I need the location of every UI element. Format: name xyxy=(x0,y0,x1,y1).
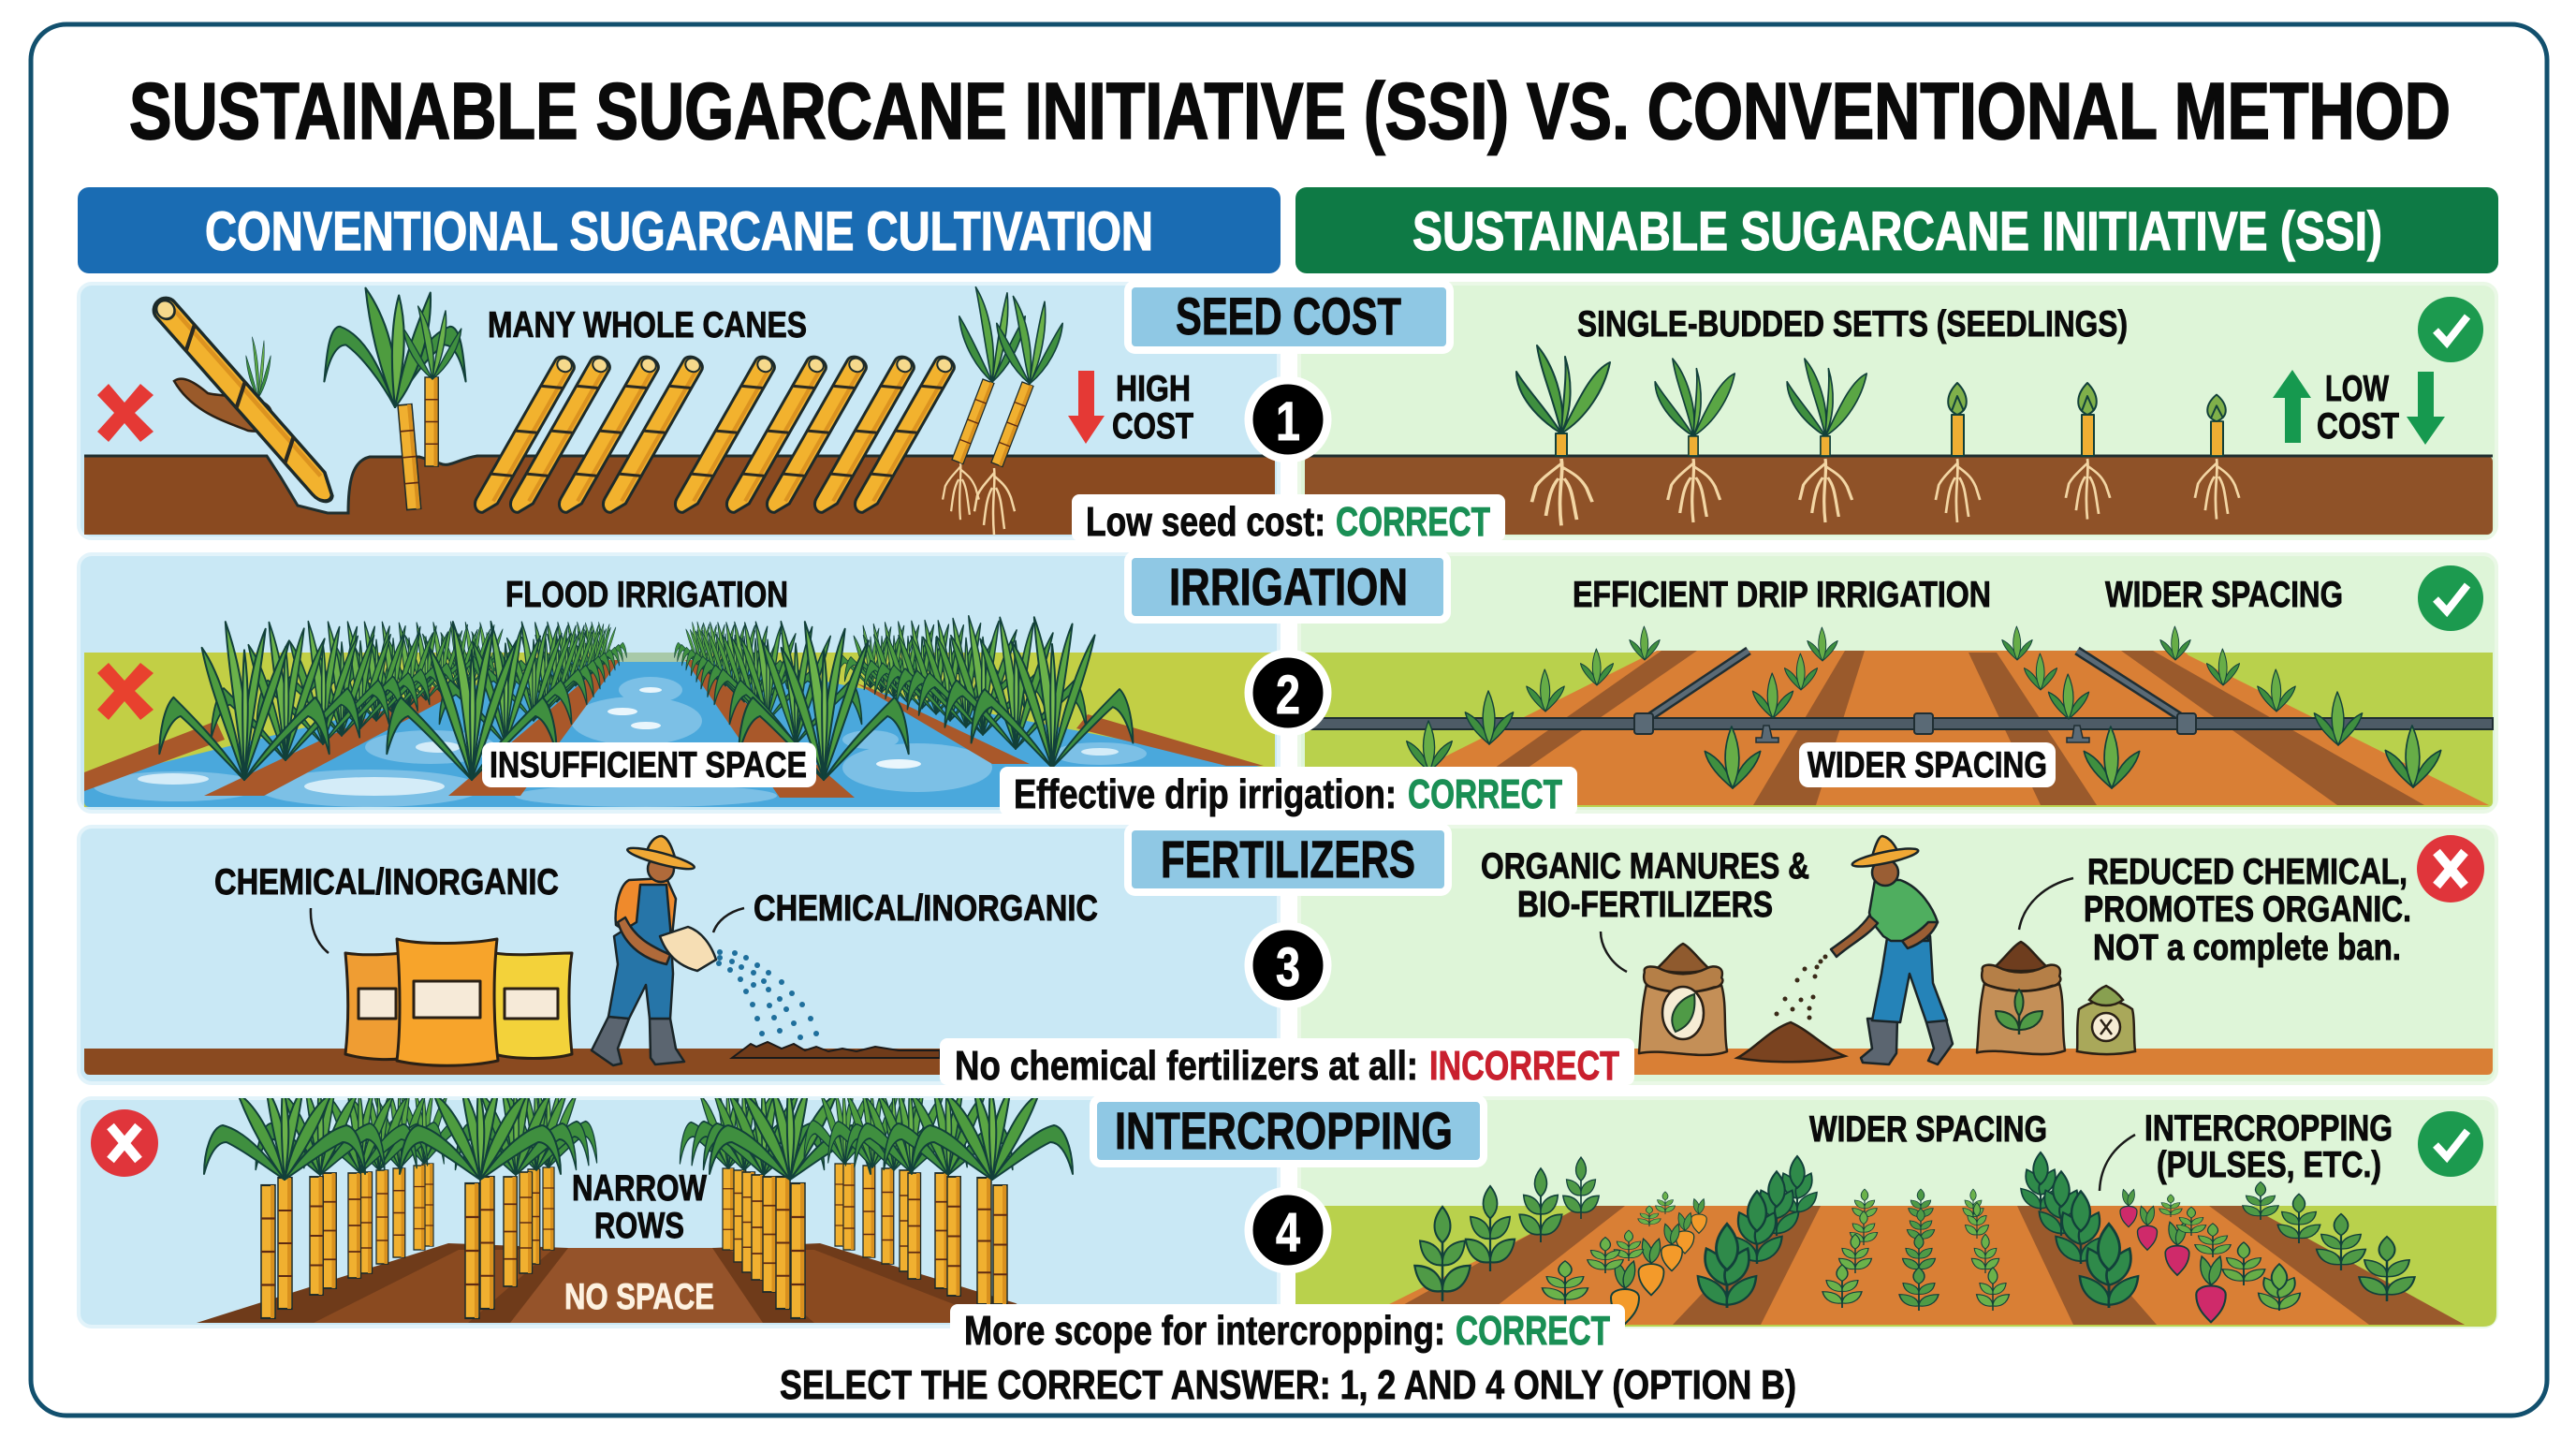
field xyxy=(1295,1206,2496,1327)
fertilizer granules xyxy=(716,949,819,1040)
icon: red cross xyxy=(97,384,154,442)
label: insufficient space: INSUFFICIENT SPACE xyxy=(490,745,807,785)
farmer spreading organic manure xyxy=(1831,836,1953,1064)
panel: seed cost SSI xyxy=(1299,284,2496,538)
leader line xyxy=(311,908,329,953)
seedlings xyxy=(1407,626,2441,788)
pulse rows center xyxy=(1819,1189,2012,1311)
number badge 1: 1 xyxy=(1276,391,1300,452)
soil bed xyxy=(1348,1206,2465,1325)
panel: fertilizers SSI xyxy=(1299,827,2496,1083)
panel: intercropping conventional xyxy=(79,1086,1279,1327)
label: narrow rows xyxy=(572,1168,707,1246)
dark furrows xyxy=(1401,1206,2465,1325)
label: organic manures xyxy=(1481,846,1809,925)
leader line xyxy=(2019,878,2073,930)
label: single-budded setts: SINGLE-BUDDED SETTS (SEEDLINGS) xyxy=(1577,304,2128,345)
verdict: intercropping: CORRECT xyxy=(1456,1308,1610,1354)
flooded water xyxy=(84,653,1275,807)
icon: green check xyxy=(2418,565,2483,631)
center tab: fertilizers: FERTILIZERS xyxy=(1161,829,1415,888)
label: reduced chemical note: PROMOTES ORGANIC. xyxy=(2084,889,2411,930)
icon: red cross xyxy=(97,663,154,720)
dark furrows xyxy=(1488,651,2424,805)
fertilizer bags xyxy=(345,939,572,1065)
big green plants right xyxy=(2016,1152,2145,1310)
verdict: chemical fertilizers: No chemical fertilizers at all: xyxy=(955,1043,1418,1089)
panel: intercropping SSI xyxy=(1295,1098,2496,1327)
answer line: SELECT THE CORRECT ANSWER: 1, 2 AND 4 ONLY (OPTION B) xyxy=(780,1362,1796,1408)
number badge 2: 2 xyxy=(1276,665,1300,726)
label: intercropping pulses xyxy=(2144,1108,2393,1185)
label: reduced chemical note: NOT a complete ban. xyxy=(2093,928,2401,968)
icon: red cross badge xyxy=(91,1109,158,1177)
verdict: low seed cost: CORRECT xyxy=(1336,499,1490,545)
number badge 2 xyxy=(1249,653,1327,732)
label: intercropping pulses: (PULSES, ETC.) xyxy=(2157,1145,2381,1185)
compost pile xyxy=(1737,1022,1845,1062)
center tab: irrigation: IRRIGATION xyxy=(1169,557,1408,616)
ground xyxy=(1305,456,2493,535)
verdict: drip irrigation: Effective drip irrigation: xyxy=(1014,771,1397,817)
label: organic manures: ORGANIC MANURES & xyxy=(1481,846,1809,887)
farmer with chemical fertilizer xyxy=(592,836,716,1065)
number badge 4 xyxy=(1249,1191,1327,1269)
number badge 4: 4 xyxy=(1276,1202,1300,1263)
panel: fertilizers conventional xyxy=(79,827,1279,1083)
label: narrow rows: ROWS xyxy=(594,1206,684,1246)
field xyxy=(1305,653,2493,807)
center tab: seed cost: SEED COST xyxy=(1176,286,1401,345)
far rows of tufts xyxy=(159,616,1133,780)
big green plants left xyxy=(1690,1156,1822,1310)
sprouts and carrots xyxy=(1538,1192,1706,1324)
label: no space: NO SPACE xyxy=(564,1277,714,1317)
verdict: low seed cost xyxy=(1072,494,1505,545)
leader line xyxy=(713,908,744,932)
cane stalks far rows xyxy=(261,1164,1007,1318)
brown bunds xyxy=(84,660,1264,798)
near rows of tufts xyxy=(387,622,909,780)
label: reduced chemical note xyxy=(2084,852,2411,968)
leader line xyxy=(2100,1135,2135,1191)
column header: conventional: CONVENTIONAL SUGARCANE CULTIVATION xyxy=(205,201,1153,262)
column header: SSI xyxy=(1295,187,2498,273)
label: organic manures: BIO-FERTILIZERS xyxy=(1517,885,1773,925)
falling manure xyxy=(1775,955,1827,1020)
field xyxy=(84,653,1275,807)
ground xyxy=(84,1049,945,1075)
low cost arrows and label: COST xyxy=(2317,406,2399,447)
panel: irrigation conventional xyxy=(79,554,1279,812)
drip pipes xyxy=(1305,651,2493,742)
number badge 1 xyxy=(1249,380,1327,459)
label: chemical inorganic bags: CHEMICAL/INORGANIC xyxy=(214,862,559,902)
high cost arrow and label: HIGH xyxy=(1116,369,1191,409)
row of whole canes xyxy=(472,354,958,518)
low cost arrows and label: LOW xyxy=(2325,369,2389,409)
soil bed xyxy=(1348,651,2489,805)
label: wider spacing: WIDER SPACING xyxy=(2105,575,2343,615)
ground xyxy=(1629,1049,2493,1075)
icon: green check xyxy=(2418,1111,2483,1177)
budded setts with roots xyxy=(1936,383,2239,522)
leader line xyxy=(1601,932,1627,972)
column header: conventional xyxy=(78,187,1281,273)
low cost arrows and label xyxy=(2273,369,2445,447)
soil mound xyxy=(732,1042,940,1058)
label: wider spacing: WIDER SPACING xyxy=(1809,1109,2047,1150)
radishes xyxy=(2120,1188,2226,1322)
verdict: low seed cost: Low seed cost: xyxy=(1086,499,1325,545)
label: wider spacing badge: WIDER SPACING xyxy=(1808,745,2047,785)
cane leaf canopy xyxy=(203,1098,1074,1181)
sack with plant emblem xyxy=(1977,942,2065,1054)
column header: SSI: SUSTAINABLE SUGARCANE INITIATIVE (SSI) xyxy=(1412,201,2382,262)
verdict: chemical fertilizers: INCORRECT xyxy=(1429,1043,1619,1089)
high cost arrow and label xyxy=(1068,369,1193,447)
verdict: intercropping: More scope for intercropping: xyxy=(964,1308,1445,1354)
panel: irrigation SSI xyxy=(1299,554,2496,812)
label: chemical inorganic spray: CHEMICAL/INORGANIC xyxy=(754,888,1098,929)
seedlings with roots xyxy=(1516,345,1866,525)
label: reduced chemical note: REDUCED CHEMICAL, xyxy=(2087,852,2408,892)
ground with planting hole xyxy=(84,456,1275,535)
standing cane plants xyxy=(324,288,466,510)
panel: seed cost conventional xyxy=(79,284,1279,538)
label: efficient drip irrigation: EFFICIENT DRIP IRRIGATION xyxy=(1573,575,1991,615)
label: narrow rows: NARROW xyxy=(572,1168,707,1209)
label: many whole canes: MANY WHOLE CANES xyxy=(488,305,807,345)
icon: green check xyxy=(2418,297,2483,362)
rooted canes at right xyxy=(943,287,1062,535)
label: intercropping pulses: INTERCROPPING xyxy=(2144,1108,2393,1149)
cane stalks center rows xyxy=(465,1167,805,1318)
icon: red cross badge xyxy=(2417,835,2484,902)
verdict: drip irrigation: CORRECT xyxy=(1408,771,1562,817)
diagonal whole cane and hand xyxy=(150,294,341,506)
ground rows xyxy=(197,1243,1048,1323)
center tab: intercropping: INTERCROPPING xyxy=(1115,1101,1453,1160)
sack with leaf emblem xyxy=(1639,944,1727,1055)
high cost arrow and label: COST xyxy=(1112,406,1193,447)
bean plants right xyxy=(2239,1181,2420,1301)
small chemical sack xyxy=(2077,986,2135,1054)
number badge 3: 3 xyxy=(1276,937,1300,998)
label: flood irrigation: FLOOD IRRIGATION xyxy=(505,575,788,615)
bean plants left xyxy=(1410,1157,1603,1301)
number badge 3 xyxy=(1249,926,1327,1005)
leafy greens xyxy=(2157,1195,2305,1312)
